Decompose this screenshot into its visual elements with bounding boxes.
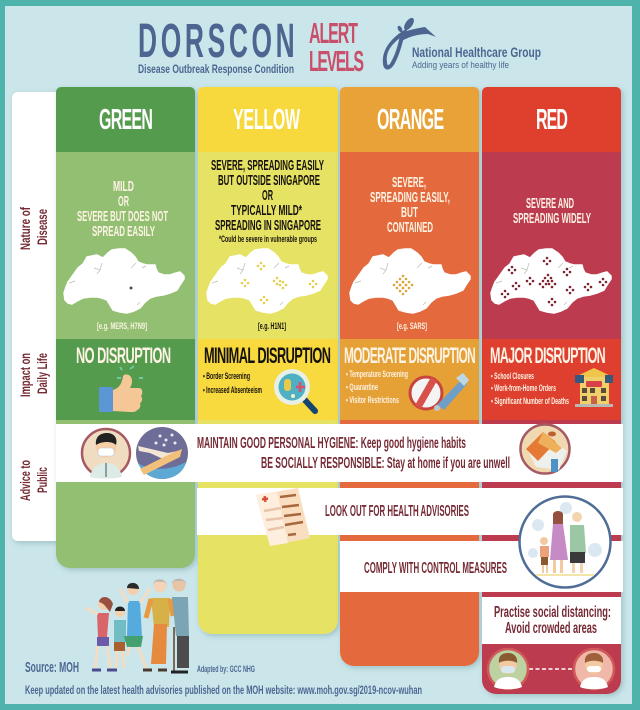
- label: nature of disease: Nature of: [17, 207, 33, 250]
- bullets: • Quarantine: [346, 382, 378, 393]
- nature text: [211, 157, 324, 244]
- nature text: MILD: [113, 178, 134, 195]
- nature text: SPREADING IN SINGAPORE: [215, 217, 321, 234]
- icon: masked person left: [488, 649, 528, 689]
- nature text: SEVERE, SPREADING EASILY: [211, 157, 324, 174]
- subtitle: Disease Outbreak Response Condition: [138, 62, 294, 76]
- heading: orange: ORANGE: [377, 103, 444, 135]
- father: [570, 512, 586, 573]
- impact heading: MODERATE DISRUPTION: [344, 343, 476, 368]
- label: impact on daily life: [17, 353, 50, 397]
- grandmother: [143, 579, 173, 670]
- nature text: [77, 178, 168, 240]
- nature text: SPREADING EASILY,: [370, 189, 450, 206]
- example: [e.g. H1N1]: [258, 321, 286, 331]
- impact heading: MINIMAL DISRUPTION: [204, 343, 331, 368]
- logo: National Healthcare Group: National Healthcare Group: [412, 44, 541, 60]
- label: impact on daily life: Impact on: [17, 353, 33, 397]
- text: COMPLY WITH CONTROL MEASURES: [364, 560, 507, 577]
- icon: closed school: [575, 368, 613, 407]
- girl: [86, 597, 117, 670]
- label: advice to public: [17, 460, 50, 501]
- bullets: • Visitor Restrictions: [346, 395, 399, 406]
- map: singapore: [64, 249, 184, 313]
- label: nature of disease: [17, 207, 50, 250]
- heading: yellow: YELLOW: [233, 103, 301, 135]
- bullets: • Temperature Screening: [346, 369, 408, 380]
- nature text: [370, 174, 450, 236]
- band: hygiene advice: [56, 424, 623, 482]
- boy small: [114, 606, 126, 668]
- adapted by credit: Adapted by: GCC NHG: [197, 664, 255, 674]
- icon: family circle: [520, 496, 610, 588]
- bullets: • Significant Number of Deaths: [491, 396, 569, 407]
- nature text: SEVERE BUT DOES NOT: [77, 208, 168, 225]
- dashed distance line: [529, 668, 573, 670]
- bullets: • Increased Absenteeism: [203, 385, 262, 396]
- child: [540, 537, 549, 573]
- nature text: SEVERE,: [392, 174, 426, 191]
- heading: green: GREEN: [99, 103, 153, 135]
- nature text: TYPICALLY MILD*: [231, 202, 302, 219]
- bullets: [203, 371, 262, 396]
- icon: thermometer prohibited: [410, 373, 469, 411]
- panel: green column: [56, 87, 195, 568]
- example: [e.g. MERS, H7N9]: [97, 321, 147, 331]
- heading: red: RED: [536, 103, 568, 135]
- panel: orange column: [340, 87, 479, 666]
- bullets: • Border Screening: [203, 371, 250, 382]
- logo: National Healthcare Group: [383, 16, 541, 70]
- logo: National Healthcare Group: Adding years of healthy life: [412, 60, 509, 70]
- nature text: BUT: [401, 204, 418, 221]
- nature text: SPREAD EASILY: [92, 223, 155, 240]
- label: advice to public: Public: [34, 467, 50, 493]
- nature text: [513, 195, 591, 227]
- label: nature of disease: Disease: [34, 209, 50, 245]
- icon: document: [256, 488, 310, 546]
- impact heading: NO DISRUPTION: [76, 343, 171, 368]
- mother: [550, 511, 568, 573]
- impact panel: [198, 339, 338, 420]
- grandfather: [171, 578, 189, 673]
- bullets: • Work-from-Home Orders: [491, 383, 556, 394]
- icon: thumbs up: [99, 366, 143, 412]
- bullets: • School Closures: [491, 371, 534, 382]
- bullets: [346, 369, 408, 406]
- panel: row labels: [12, 92, 72, 541]
- icon: masked person: [82, 429, 130, 478]
- nature text: BUT OUTSIDE SINGAPORE: [218, 172, 320, 189]
- nature text: OR: [262, 187, 273, 204]
- text: LOOK OUT FOR HEALTH ADVISORIES: [325, 503, 469, 520]
- impact panel: [482, 339, 621, 420]
- impact panel: [340, 339, 479, 420]
- illustration: family group: [86, 578, 189, 673]
- band: health advisories: [197, 488, 623, 546]
- map: singapore with clusters: [207, 249, 327, 313]
- nature text: OR: [118, 193, 129, 210]
- panel: yellow column: [198, 87, 338, 634]
- source: Source: MOH: [25, 659, 79, 676]
- map: singapore with clusters: [491, 249, 611, 313]
- map: singapore with cluster: [350, 249, 470, 313]
- icon: magnifier: [274, 369, 315, 411]
- teen boy: [120, 583, 150, 668]
- nature text: *Could be severe in vulnerable groups: [219, 234, 317, 244]
- alert levels heading: [309, 17, 364, 77]
- alert levels heading: ALERT: [309, 17, 358, 49]
- panel: social distancing: [482, 597, 621, 689]
- panel: red column: [482, 87, 621, 694]
- impact panel: [56, 339, 195, 420]
- band: control measures: [340, 541, 623, 592]
- bullets: [491, 371, 569, 407]
- nature text: CONTAINED: [387, 219, 433, 236]
- nature text: SEVERE AND: [526, 195, 574, 212]
- alert levels heading: LEVELS: [309, 45, 364, 77]
- label: impact on daily life: Daily Life: [34, 353, 50, 394]
- impact heading: MAJOR DISRUPTION: [490, 343, 606, 368]
- example: [e.g. SARS]: [397, 321, 427, 331]
- icon: masked person right: [574, 649, 614, 689]
- title: DORSCON: DORSCON: [138, 15, 295, 68]
- header: [138, 15, 541, 77]
- icon: house: [520, 424, 570, 474]
- icon: hand washing: [136, 427, 188, 479]
- label: advice to public: Advice to: [17, 460, 33, 501]
